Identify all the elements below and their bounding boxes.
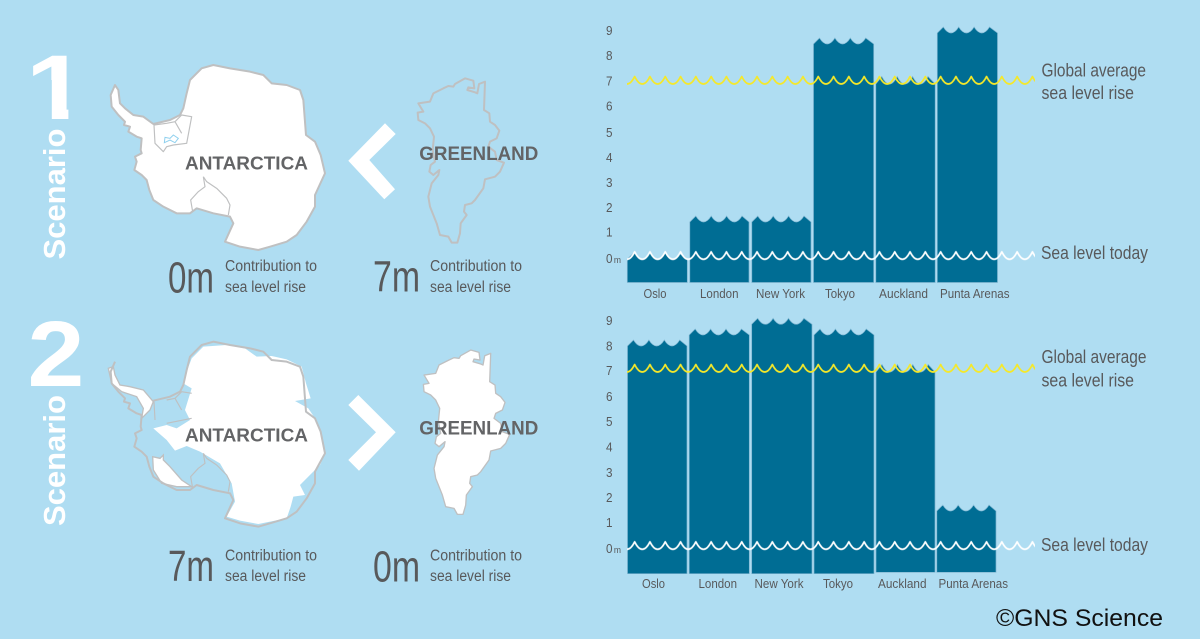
axis labels: 0m xyxy=(606,251,621,266)
map: Greenland outline scenario 1 xyxy=(418,78,504,243)
label: Greenland: GREENLAND xyxy=(419,417,538,439)
arrow: Antarctica greater than Greenland xyxy=(348,395,396,471)
stat: Greenland 7m: Contribution to xyxy=(430,258,522,275)
map: Antarctica scenario 2 xyxy=(108,342,325,527)
line: global average sea level rise xyxy=(627,362,1035,374)
axis labels: 1 xyxy=(606,225,613,240)
stat: Greenland 0m: sea level rise xyxy=(430,568,511,585)
axis labels: 5 xyxy=(606,125,613,140)
stat: Greenland 0m: 0m xyxy=(373,543,420,592)
axis labels: 6 xyxy=(606,389,613,404)
bar: New York xyxy=(752,216,811,282)
axis labels: 6 xyxy=(606,99,613,114)
panel: scenario 2 xyxy=(28,302,538,592)
stat: Antarctica 7m: Contribution to xyxy=(225,548,317,565)
city labels: Punta Arenas xyxy=(938,576,1008,591)
stat: Antarctica 0m: sea level rise xyxy=(225,279,306,296)
line: sea level today xyxy=(627,249,1035,261)
axis labels: 2 xyxy=(606,490,613,505)
axis labels: 4 xyxy=(606,440,613,455)
stat: Antarctica 7m: 7m xyxy=(168,542,214,591)
heading: Scenario 1: Scenario xyxy=(37,128,72,260)
stat: Greenland 7m: sea level rise xyxy=(430,279,511,296)
city labels: Auckland xyxy=(878,576,926,591)
legend: sea level today: Sea level today xyxy=(1041,242,1149,263)
panel: scenario 1 xyxy=(33,56,538,293)
stat: Greenland 0m xyxy=(373,543,522,592)
line: global average sea level rise xyxy=(627,74,1035,86)
label: Greenland: GREENLAND xyxy=(419,143,538,165)
axis labels: 5 xyxy=(606,414,613,429)
legend: global average: Global average xyxy=(1042,60,1146,81)
stat: Greenland 7m xyxy=(373,253,522,302)
axis labels: 0m xyxy=(606,541,621,556)
axis labels: 2 xyxy=(606,200,613,215)
legend: global average: Global average xyxy=(1042,346,1146,367)
numeral 2: 2 xyxy=(28,302,84,406)
chart: scenario 2 city sea level rise xyxy=(606,313,1149,591)
bar: Punta Arenas xyxy=(937,27,998,282)
bar: Tokyo xyxy=(814,329,874,574)
legend: global average xyxy=(1042,346,1146,390)
city labels: Auckland xyxy=(879,286,928,301)
city labels: Oslo xyxy=(644,286,666,301)
stat: Antarctica 0m xyxy=(168,254,317,303)
bar: Tokyo xyxy=(814,38,874,282)
bar: Oslo xyxy=(627,252,687,282)
axis labels: 4 xyxy=(606,150,613,165)
city labels: New York xyxy=(754,576,804,591)
numeral 1: 1 xyxy=(26,36,87,139)
credit: ©GNS Science xyxy=(996,605,1163,632)
city labels: New York xyxy=(756,286,805,301)
axis labels xyxy=(606,313,621,556)
arrow: Antarctica less than Greenland xyxy=(348,123,396,199)
axis labels: 9 xyxy=(606,313,613,328)
axis labels: 7 xyxy=(606,74,613,89)
map: Antarctica scenario 1 xyxy=(111,65,325,250)
bar: London xyxy=(690,216,749,282)
legend: global average: sea level rise xyxy=(1042,370,1134,390)
bar: New York xyxy=(752,318,812,574)
line: sea level today xyxy=(627,539,1035,551)
bar: Oslo xyxy=(628,340,687,574)
chart: scenario 1 city sea level rise xyxy=(606,23,1149,301)
stat: Antarctica 0m: 0m xyxy=(168,254,214,303)
city labels: London xyxy=(700,286,738,301)
axis labels xyxy=(606,23,621,266)
stat: Antarctica 7m xyxy=(168,542,317,591)
axis labels: 7 xyxy=(606,363,613,378)
axis labels: 8 xyxy=(606,48,613,63)
axis labels: 8 xyxy=(606,339,613,354)
bar: Punta Arenas xyxy=(937,505,996,572)
label: Antarctica: ANTARCTICA xyxy=(185,152,308,173)
stat: Antarctica 7m: sea level rise xyxy=(225,568,306,585)
axis labels: 1 xyxy=(606,515,613,530)
city labels: Oslo xyxy=(642,576,665,591)
bar: London xyxy=(689,329,749,574)
city labels xyxy=(642,576,1008,591)
label: Antarctica: ANTARCTICA xyxy=(185,425,308,446)
city labels xyxy=(644,286,1010,301)
heading: Scenario 2: Scenario xyxy=(37,395,72,526)
bar: Auckland xyxy=(876,364,935,572)
axis labels: 9 xyxy=(606,23,613,38)
map: Greenland filled scenario 2 xyxy=(423,350,510,514)
stat: Antarctica 0m: Contribution to xyxy=(225,258,317,275)
city labels: Tokyo xyxy=(823,576,853,591)
city labels: London xyxy=(698,576,737,591)
city labels: Punta Arenas xyxy=(940,286,1010,301)
stat: Greenland 7m: 7m xyxy=(373,253,420,302)
legend: global average xyxy=(1042,60,1146,103)
stat: Greenland 0m: Contribution to xyxy=(430,548,522,565)
legend: global average: sea level rise xyxy=(1042,82,1134,103)
city labels: Tokyo xyxy=(825,286,855,301)
axis labels: 3 xyxy=(606,175,613,190)
legend: sea level today: Sea level today xyxy=(1041,534,1149,555)
axis labels: 3 xyxy=(606,465,613,480)
bar: Auckland xyxy=(876,76,935,282)
